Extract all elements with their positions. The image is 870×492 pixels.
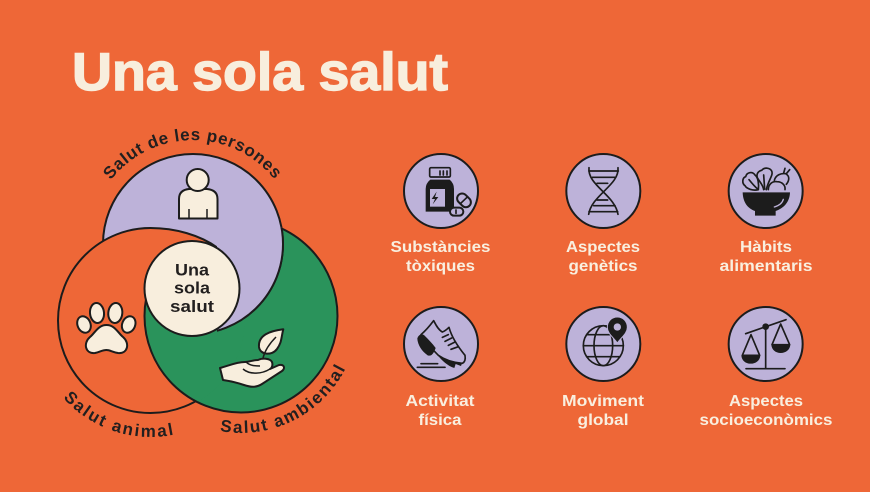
- label: [566, 239, 640, 275]
- centre label: salut: [170, 297, 214, 316]
- label: [720, 239, 813, 275]
- label: tòxiques: [406, 258, 475, 275]
- label: física: [418, 412, 462, 429]
- icon badge: salad bowl: [729, 154, 803, 228]
- label: [700, 393, 833, 429]
- label: [406, 393, 475, 429]
- label: [390, 239, 491, 275]
- label: Activitat: [406, 393, 475, 410]
- item: socioeconomic aspects: [700, 307, 833, 429]
- icon badge: DNA: [566, 154, 640, 228]
- icon badge: scales: [729, 307, 803, 381]
- circle: centre: [144, 241, 240, 336]
- label: alimentaris: [720, 258, 813, 275]
- icon badge: bottle and pills: [404, 154, 478, 228]
- label: [562, 393, 645, 429]
- venn diagram: [57, 128, 345, 437]
- label: human health: Salut de les persones: [104, 128, 280, 178]
- label: Substàncies: [390, 239, 491, 256]
- icon: hand holding leaf: [220, 329, 284, 387]
- label: global: [578, 412, 628, 429]
- item: genetic aspects: [566, 154, 640, 275]
- item: eating habits: [720, 154, 813, 275]
- icon badge: running shoe: [404, 307, 478, 381]
- centre label: [170, 260, 214, 316]
- label: Hàbits: [740, 239, 792, 256]
- item: global movement: [562, 307, 645, 429]
- label: Aspectes: [729, 393, 803, 410]
- overlap: environmental over animal: [144, 300, 244, 402]
- label: Moviment: [562, 393, 645, 410]
- item: toxic substances: [390, 154, 491, 275]
- circle: environmental health: [144, 220, 338, 412]
- icon badge: globe with pin: [566, 307, 640, 381]
- overlap: human over environmental: [217, 228, 284, 332]
- item: physical activity: [404, 307, 478, 429]
- circle: animal health: [58, 228, 243, 413]
- title: Una sola salut: [72, 43, 448, 102]
- icon: person: [179, 169, 218, 218]
- centre label: sola: [174, 278, 211, 298]
- label: genètics: [568, 258, 638, 275]
- label: Aspectes: [566, 239, 640, 256]
- icon: paw: [75, 302, 138, 353]
- label: socioeconòmics: [700, 412, 833, 429]
- label: environmental health: Salut ambiental: [220, 364, 345, 434]
- circle: human health: [103, 154, 283, 334]
- centre label: Una: [175, 260, 210, 280]
- label: animal health: Salut animal: [64, 392, 173, 437]
